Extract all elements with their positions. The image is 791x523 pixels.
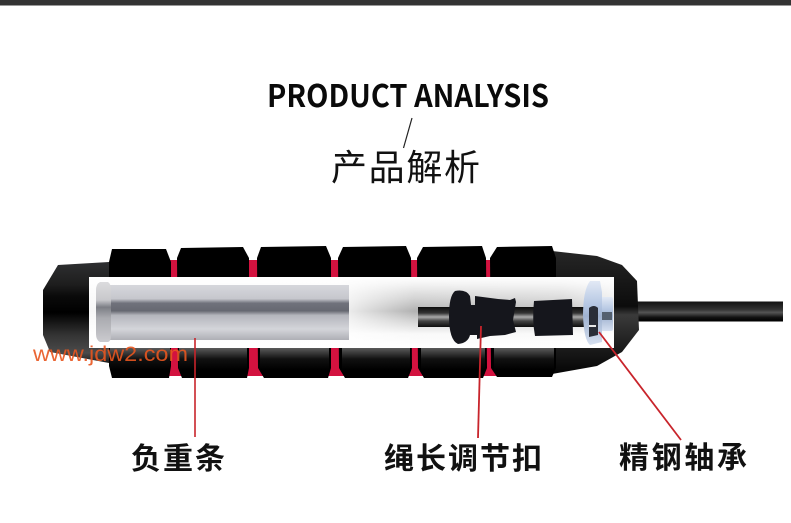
foam grip segments [109,246,556,378]
red core [165,260,500,376]
jump rope handle illustration [43,246,783,378]
slash divider [404,118,412,148]
label: steel bearing: 精钢轴承 [619,433,747,477]
right end cap [552,251,639,374]
red leader line: weight bar [194,338,196,437]
weight bar [96,282,349,342]
watermark: www.jdw2.com [32,343,188,366]
rope length adjuster buckle [449,291,573,344]
chinese title: 产品解析 [331,139,480,191]
left end cap [43,262,109,363]
foam lower reflection [110,348,554,370]
inner rope [418,307,585,327]
cutaway white panel [89,277,614,348]
rope [636,302,783,322]
red leader line: bearing [599,332,681,440]
label: weight bar: 负重条 [131,434,225,478]
title: product analysis: PRODUCT ANALYSIS [267,71,549,116]
red leader line: buckle [478,326,481,438]
steel bearing and nut [583,281,613,345]
top bar [0,0,791,6]
label: rope length buckle: 绳长调节扣 [384,434,542,478]
